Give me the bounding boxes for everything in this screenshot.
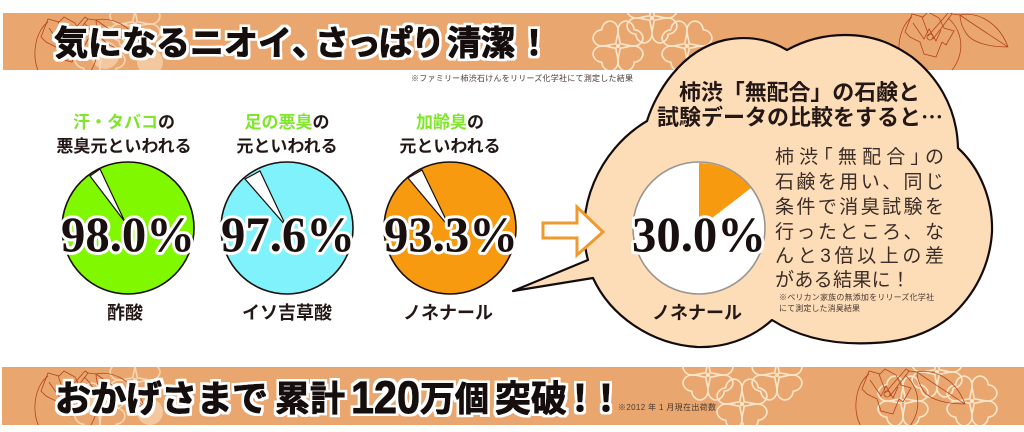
shipment note: ※2012 年 1 月現在出荷数 xyxy=(618,402,716,412)
bottom headline: 120 xyxy=(351,372,420,423)
body text: 行ったところ、な xyxy=(775,221,944,243)
heading: 元といわれる xyxy=(236,137,338,156)
footnote: にて測定した消臭結果 xyxy=(779,303,860,313)
pie chart xyxy=(62,162,194,294)
bottom pattern: left flowers xyxy=(74,367,163,425)
footnote: ※ペリカン家族の無添加をリリーズ化学社 xyxy=(779,292,934,302)
bubble heading: 試験データの比較をすると xyxy=(657,105,921,130)
bottom pattern: right flowers xyxy=(682,367,998,425)
banner pattern: left flowers xyxy=(74,13,163,70)
title: 、 xyxy=(292,25,326,63)
top banner xyxy=(3,13,1024,70)
title: 気になるニオイ xyxy=(54,25,292,63)
pie chart 30 percent xyxy=(633,162,765,294)
bubble heading: … xyxy=(921,100,943,132)
arrow xyxy=(543,207,603,255)
pie panel: isovaleric acid xyxy=(221,113,355,323)
bottom headline: ！ xyxy=(588,378,624,419)
value: 93.3% xyxy=(384,206,518,262)
speech bubble xyxy=(513,35,992,347)
bubble heading: 柿渋「無配合」の石鹸と xyxy=(679,80,920,105)
comparison panel xyxy=(632,80,944,323)
value: 98.0% xyxy=(61,206,195,262)
label: ノネナール xyxy=(652,303,742,323)
heading: 足の悪臭の xyxy=(244,113,330,132)
banner pattern: right flowers xyxy=(592,13,713,70)
pie panel: acetic acid xyxy=(56,113,195,323)
pie panel: nonenal xyxy=(384,113,518,323)
body text: 石鹸を用い、同じ xyxy=(775,171,944,193)
body text: んと3倍以上の差 xyxy=(775,245,944,267)
value: 30.0% xyxy=(632,206,766,262)
title: ！ xyxy=(517,25,551,63)
heading: 汗・タバコの xyxy=(73,113,175,132)
title: 清潔 xyxy=(447,25,515,63)
pie chart xyxy=(384,162,516,294)
icon: persimmon left xyxy=(34,16,139,70)
body text: がある結果に！ xyxy=(775,269,910,291)
icon: persimmon right xyxy=(898,13,1008,70)
heading: 元といわれる xyxy=(399,137,501,156)
body text: 条件で消臭試験を xyxy=(775,196,944,218)
label: 酢酸 xyxy=(107,302,143,323)
icon: persimmon bottom right xyxy=(856,369,965,432)
heading: 悪臭元といわれる xyxy=(56,137,192,156)
label: イソ吉草酸 xyxy=(242,303,332,323)
bottom headline: おかげさまで xyxy=(55,378,268,419)
bottom headline: 万 xyxy=(420,380,455,419)
title: さっぱり xyxy=(315,25,445,63)
bottom headline: 突破 xyxy=(495,378,567,419)
bottom headline: 累計 xyxy=(275,380,345,419)
bottom headline: ！ xyxy=(562,378,598,419)
value: 97.6% xyxy=(221,206,355,262)
source note top: ※ファミリー柿渋石けんをリリーズ化学社にて測定した結果 xyxy=(411,73,633,83)
bottom headline: 個 xyxy=(455,381,489,419)
icon: persimmon bottom left xyxy=(34,370,144,425)
bottom banner xyxy=(2,367,1024,425)
label: ノネナール xyxy=(403,303,493,323)
pie chart xyxy=(221,162,353,294)
body text: 柿渋｢無配合｣の xyxy=(775,146,944,168)
heading: 加齢臭の xyxy=(416,113,484,132)
